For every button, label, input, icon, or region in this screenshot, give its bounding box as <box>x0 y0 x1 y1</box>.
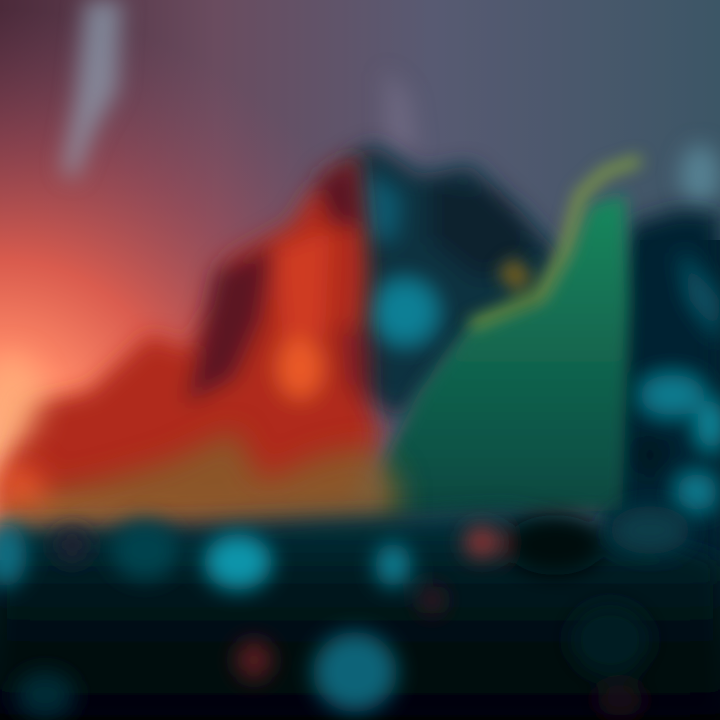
foreground bokeh lights <box>0 506 690 719</box>
right dark mountain <box>600 210 720 580</box>
dark lower foreground <box>0 510 720 720</box>
green hill <box>380 195 630 520</box>
yellow ridge line <box>470 160 640 325</box>
olive foothills <box>0 430 400 530</box>
right mountain base <box>640 240 720 560</box>
light streaks in sky <box>62 0 720 205</box>
red mountain <box>0 155 378 510</box>
orange glow on left horizon <box>0 355 42 445</box>
teal mountain <box>340 145 560 420</box>
lower foreground base <box>0 560 720 720</box>
